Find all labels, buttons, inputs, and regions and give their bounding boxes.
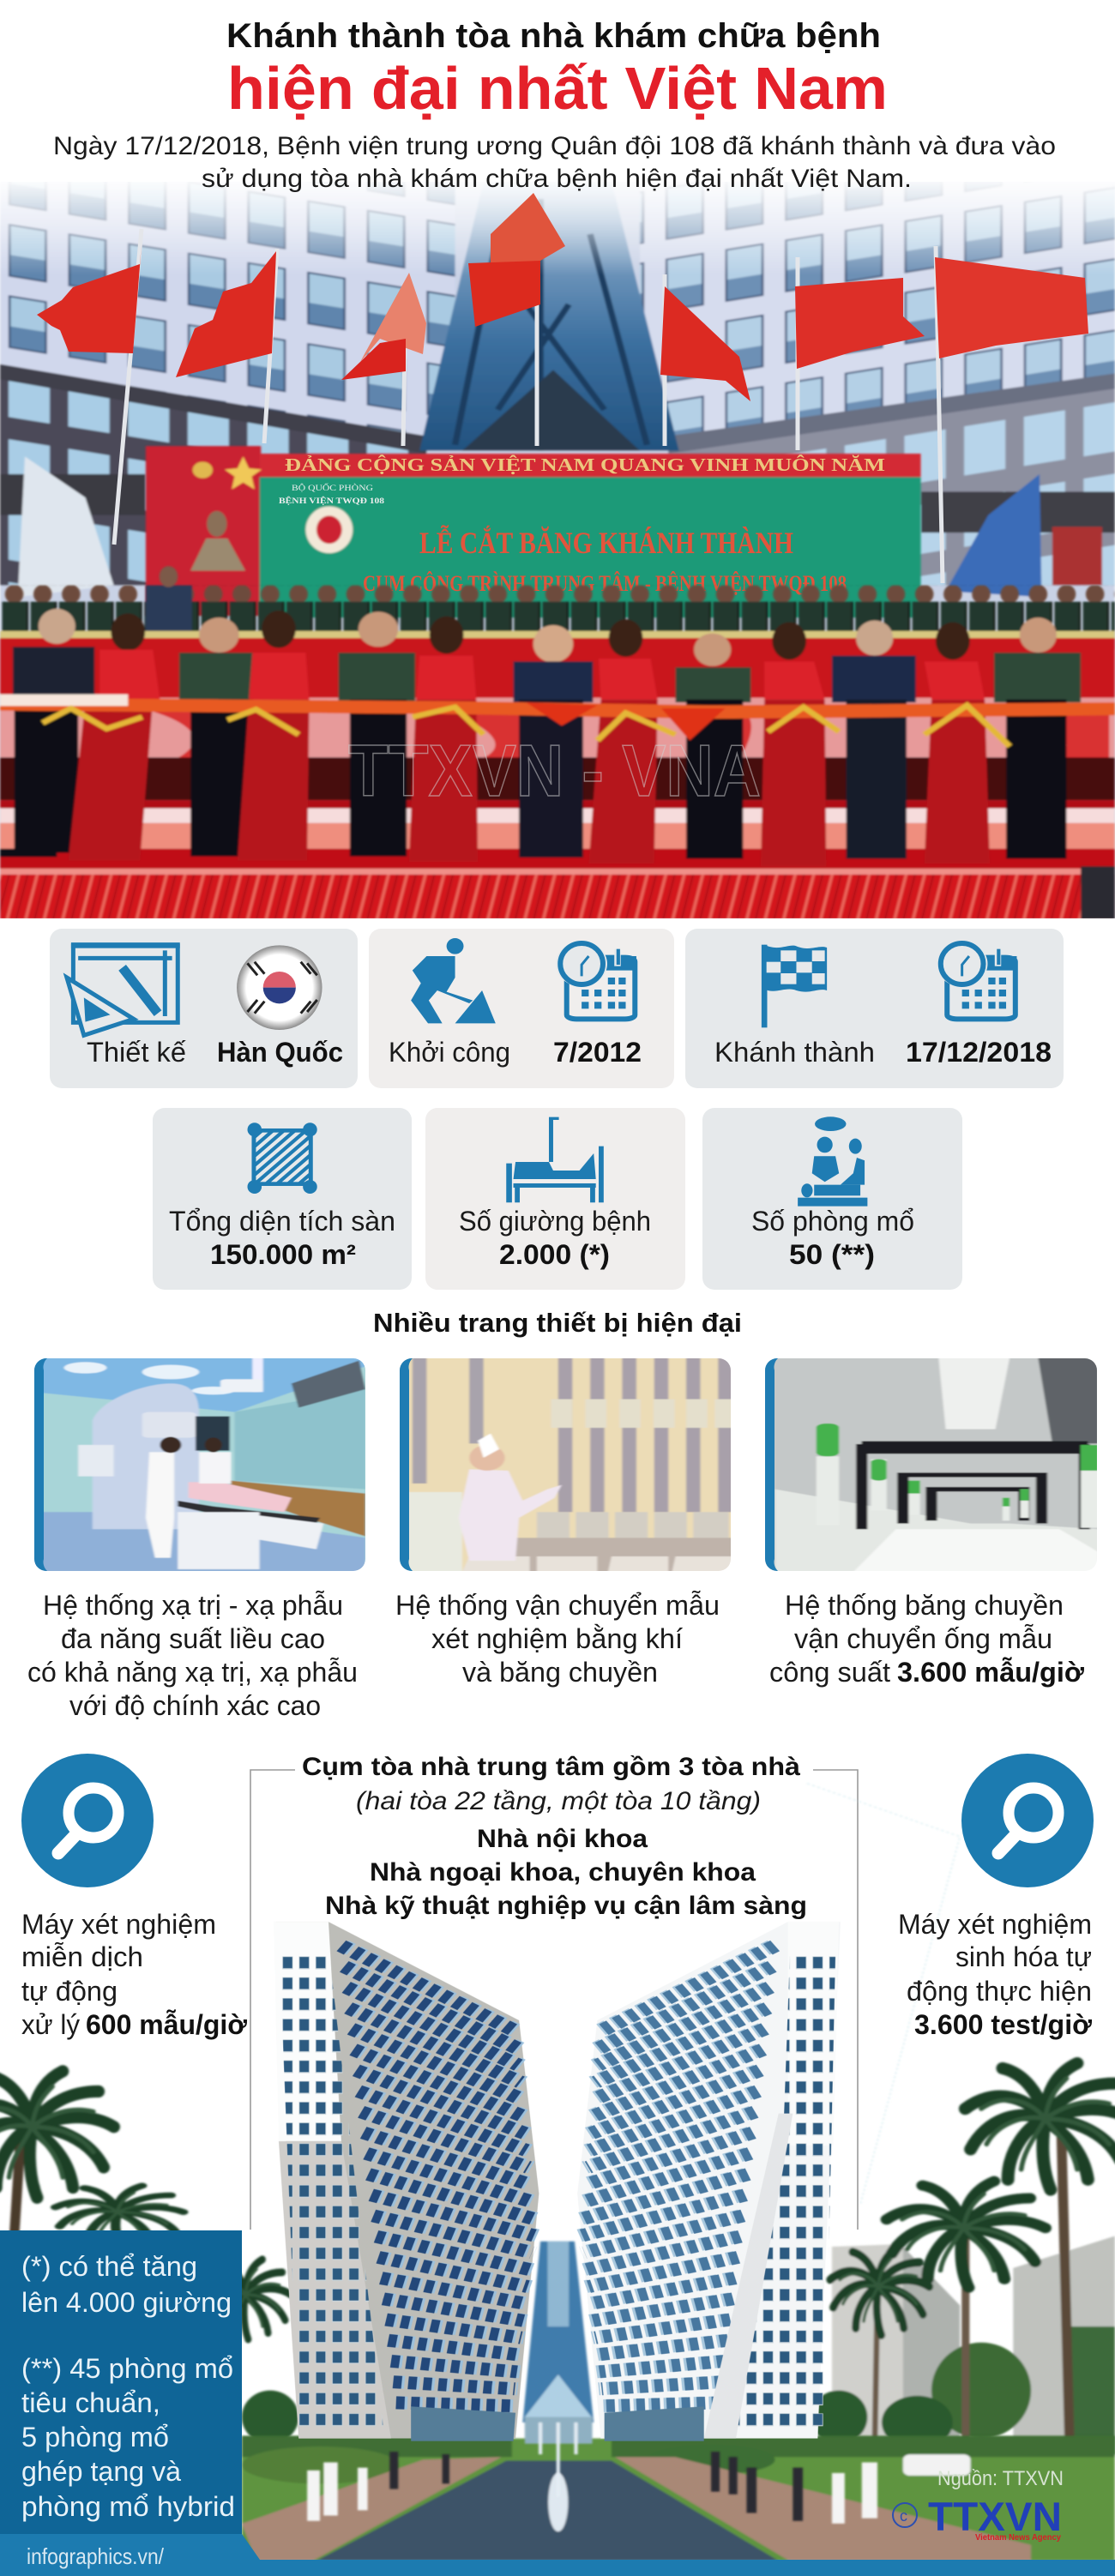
text: biochemistry analyzer: Máy xét nghiệm (898, 1909, 1092, 1940)
building scene (0, 1784, 1115, 2561)
intro text: sử dụng tòa nhà khám chữa bệnh hiện đại nhất Việt Nam. (202, 165, 912, 193)
backdrop banner text: BỆNH VIỆN TWQĐ 108 (279, 497, 385, 505)
caption: pneumatic tube: xét nghiệm bằng khí (431, 1623, 683, 1654)
panel: groundbreaking: Khởi công (389, 1037, 510, 1068)
backdrop banner text: BỘ QUỐC PHÒNG (292, 484, 374, 492)
panel: groundbreaking (369, 929, 674, 1088)
icon: checkered flag (762, 945, 827, 1027)
logo: TTXVN: Vietnam News Agency (975, 2533, 1061, 2543)
garden visitors (307, 2452, 877, 2524)
icon: calendar (937, 941, 1016, 1019)
panel: floor area: Tổng diện tích sàn (169, 1206, 395, 1237)
text: biochemistry analyzer: sinh hóa tự (955, 1941, 1092, 1972)
photo accent bar (34, 1358, 47, 1571)
heading: building cluster: (hai tòa 22 tầng, một tòa 10 tầng) (356, 1787, 761, 1815)
text: immunoassay analyzer: tự động (21, 1976, 118, 2007)
caption: pneumatic tube: và băng chuyền (462, 1657, 658, 1688)
footnote panel: 5 phòng mổ (21, 2422, 169, 2453)
text: biochemistry analyzer (898, 1909, 1092, 2040)
backdrop banner text: CỤM CÔNG TRÌNH TRUNG TÂM - BỆNH VIỆN TWQĐ 108 (363, 571, 847, 596)
icon: floor area (247, 1122, 317, 1194)
photo background: building (0, 176, 1115, 925)
photo: radiotherapy system (34, 1357, 368, 1572)
panel: design: Thiết kế (87, 1037, 186, 1068)
heading: building cluster: Nhà nội khoa (477, 1825, 648, 1853)
panel: floor area: 150.000 m² (210, 1239, 356, 1270)
heading: modern equipment: Nhiều trang thiết bị hiện đại (373, 1308, 742, 1338)
watermark: TTXVN - VNA (348, 731, 761, 812)
right tower (577, 1922, 841, 2441)
caption: radiotherapy: với độ chính xác cao (69, 1690, 321, 1721)
footnote panel: lên 4.000 giường (21, 2287, 232, 2318)
source credit: Nguồn: TTXVN (937, 2467, 1064, 2490)
text: immunoassay analyzer (21, 1909, 247, 2040)
text: biochemistry analyzer: 3.600 test/giờ (914, 2009, 1092, 2040)
footer bar (0, 2534, 1115, 2576)
heading: building cluster: Nhà kỹ thuật nghiệp vụ cận lâm sàng (325, 1892, 807, 1920)
panel: design: Hàn Quốc (217, 1037, 343, 1068)
footer bar: infographics.vn/ (27, 2543, 165, 2569)
caption: radiotherapy: có khả năng xạ trị, xạ phẫu (27, 1657, 358, 1688)
caption: conveyor (769, 1590, 1084, 1688)
icon: magnifier left (21, 1754, 154, 1887)
footnote panel: ghép tạng và (21, 2456, 181, 2487)
heading: building cluster: Cụm tòa nhà trung tâm gồm 3 tòa nhà (302, 1753, 800, 1781)
panel: groundbreaking: 7/2012 (553, 1037, 642, 1068)
footnote panel: (*) có thể tăng (21, 2251, 197, 2282)
panel: beds: 2.000 (*) (499, 1239, 610, 1270)
panel: operating rooms (702, 1108, 962, 1290)
photo accent bar (400, 1358, 413, 1571)
caption: conveyor: Hệ thống băng chuyền (785, 1590, 1064, 1621)
stage backdrop (146, 446, 921, 617)
icon: hospital bed (506, 1117, 604, 1202)
footnote panel: (**) 45 phòng mổ (21, 2353, 233, 2384)
text: biochemistry analyzer: động thực hiện (907, 1976, 1092, 2007)
backdrop banner text: ĐẢNG CỘNG SẢN VIỆT NAM QUANG VINH MUÔN NĂM (285, 454, 885, 475)
panel: design (50, 929, 358, 1088)
caption: radiotherapy: đa năng suất liều cao (61, 1623, 325, 1654)
logo: TTXVN: TTXVN (928, 2494, 1062, 2539)
icon: Korean flag (237, 945, 322, 1030)
text: immunoassay analyzer: xử lý (21, 2009, 80, 2040)
icon: magnifier right (961, 1754, 1094, 1887)
red ribbon (0, 695, 1115, 746)
panel: inauguration (685, 929, 1064, 1088)
title (226, 17, 888, 122)
central atrium and dome (522, 2242, 594, 2497)
caption: radiotherapy: Hệ thống xạ trị - xạ phẫu (43, 1590, 343, 1621)
caption: radiotherapy (27, 1590, 358, 1721)
text: immunoassay analyzer: miễn dịch (21, 1941, 143, 1972)
caption: conveyor: 3.600 mẫu/giờ (897, 1657, 1084, 1688)
title line 1: Khánh thành tòa nhà khám chữa bệnh (226, 17, 881, 55)
heading: building cluster (302, 1753, 807, 1920)
text: immunoassay analyzer: Máy xét nghiệm (21, 1909, 216, 1940)
icon: worker with shovel (411, 938, 496, 1023)
hero photo: ribbon cutting ceremony (0, 176, 1115, 925)
panel: beds (425, 1108, 685, 1290)
backdrop banner text (279, 454, 885, 596)
footnote panel (0, 2230, 242, 2534)
background buildings and palms (0, 1784, 1115, 2465)
panel: beds: Số giường bệnh (459, 1206, 651, 1237)
footnote panel: phòng mổ hybrid (21, 2491, 235, 2522)
text: immunoassay analyzer: 600 mẫu/giờ (86, 2009, 247, 2040)
icon: calendar (556, 941, 636, 1019)
panel: operating rooms: 50 (**) (789, 1239, 875, 1270)
intro text (53, 132, 1056, 193)
caption: conveyor: vận chuyển ống mẫu (794, 1623, 1052, 1654)
panel: floor area (153, 1108, 412, 1290)
caption: pneumatic tube: Hệ thống vận chuyển mẫu (395, 1590, 720, 1621)
caption: pneumatic tube (395, 1590, 720, 1688)
backdrop banner text: LỄ CẮT BĂNG KHÁNH THÀNH (419, 525, 793, 560)
photo: conveyor system (765, 1357, 1100, 1572)
garden, pool and paths (242, 2435, 1115, 2561)
panel: inauguration: 17/12/2018 (906, 1037, 1052, 1068)
panel: inauguration: Khánh thành (714, 1037, 875, 1068)
photo accent bar (765, 1358, 778, 1571)
flags and poles (37, 193, 1088, 583)
icon: drawing board (65, 944, 180, 1036)
icon: surgery (798, 1116, 867, 1207)
title line 2: hiện đại nhất Việt Nam (227, 55, 888, 122)
logo: TTXVN: c (900, 2507, 907, 2525)
front row officials (0, 609, 1081, 858)
panel: operating rooms: Số phòng mổ (751, 1206, 914, 1237)
footnote panel: tiêu chuẩn, (21, 2387, 160, 2418)
ceremony people and stage (0, 566, 1115, 919)
front row ushers in red ao dai (69, 611, 990, 866)
photo: pneumatic tube system (400, 1357, 734, 1572)
central bracket (250, 1770, 858, 2230)
caption: conveyor: công suất (769, 1657, 890, 1688)
left tower (274, 1922, 539, 2441)
intro text: Ngày 17/12/2018, Bệnh viện trung ương Quân đội 108 đã khánh thành và đưa vào (53, 132, 1056, 160)
heading: building cluster: Nhà ngoại khoa, chuyên khoa (370, 1858, 756, 1887)
